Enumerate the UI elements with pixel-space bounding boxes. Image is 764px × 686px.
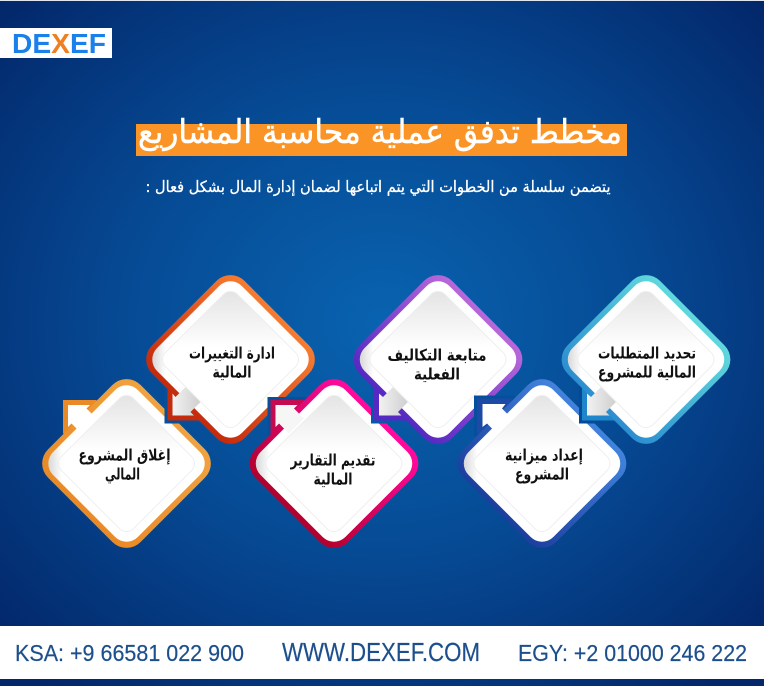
contact: KSA: KSA: +9 66581 022 900 [15, 640, 244, 666]
card: requirements [553, 267, 739, 452]
label: الفعلية [414, 364, 460, 384]
label: متابعة التكاليف [388, 346, 486, 364]
label: المالية [212, 362, 252, 382]
label [78, 446, 170, 484]
label [290, 450, 376, 488]
website: WWW.DEXEF.COM [282, 637, 480, 667]
label: إعداد ميزانية [505, 446, 583, 464]
card: reports [241, 371, 427, 556]
label [598, 344, 696, 382]
logo: DEXEF [12, 28, 106, 59]
label: تحديد المتطلبات [598, 344, 696, 362]
contact: EGY: EGY: +2 01000 246 222 [518, 640, 747, 666]
card: closing [34, 371, 219, 556]
label: المالية [314, 470, 352, 488]
label [505, 446, 583, 484]
subtitle: يتضمن سلسلة من الخطوات التي يتم اتباعها لضمان إدارة المال بشكل فعال : [146, 178, 610, 197]
label: المالية للمشروع [598, 362, 696, 382]
label: ادارة التغييرات [189, 344, 275, 362]
label: المشروع [515, 464, 569, 484]
card: budget [449, 371, 635, 556]
label: إغلاق المشروع [78, 446, 170, 464]
label: تقديم التقارير [290, 450, 376, 470]
label [388, 346, 486, 384]
label: المالي [105, 464, 140, 484]
footer [0, 626, 764, 679]
label [189, 344, 275, 382]
title: مخطط تدفق عملية محاسبة المشاريع [138, 112, 622, 152]
card: changes [138, 267, 323, 452]
card: actual costs [345, 267, 531, 452]
